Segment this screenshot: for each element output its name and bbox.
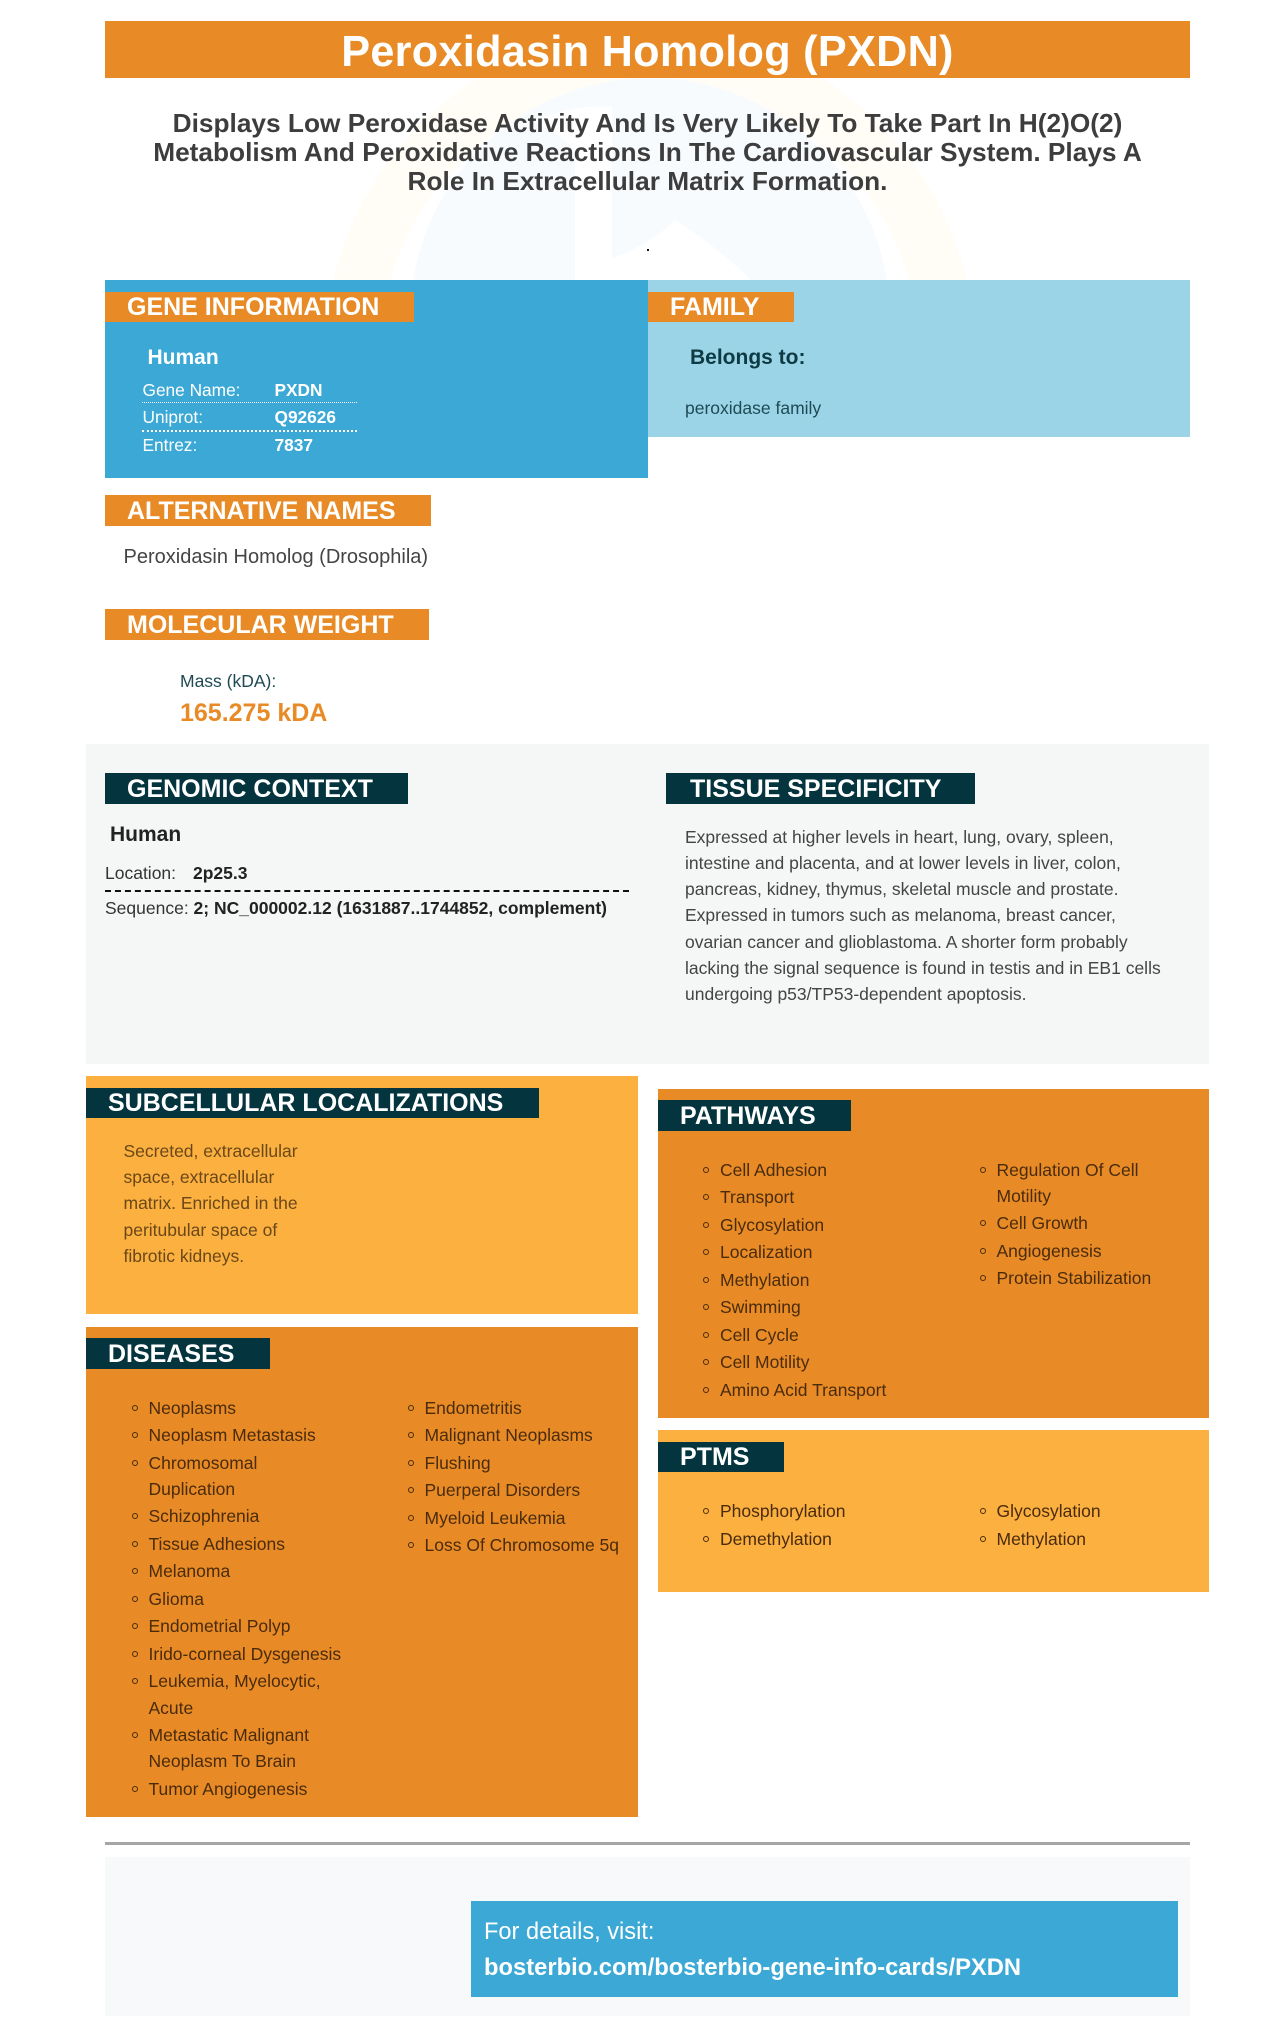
diseases list column 1: Neoplasms: [148, 1398, 236, 1418]
location row: 2p25.3: [193, 863, 247, 883]
pathways list column 1: Cell Adhesion: [720, 1160, 827, 1180]
pathways list column 1: [703, 1160, 886, 1400]
pathways list column 1: Transport: [720, 1187, 794, 1207]
heading: diseases: DISEASES: [108, 1340, 234, 1368]
diseases list column 2: Myeloid Leukemia: [424, 1508, 566, 1528]
ptms list column 1: Demethylation: [720, 1529, 832, 1549]
gene name row: [142, 377, 357, 403]
heading: ptms: [658, 1442, 784, 1472]
diseases list column 1: Schizophrenia: [148, 1506, 259, 1526]
diseases list column 1: Tissue Adhesions: [148, 1534, 285, 1554]
details url: bosterbio.com/bosterbio-gene-info-cards/PXDN: [484, 1954, 1021, 1981]
heading: molecular weight: MOLECULAR WEIGHT: [127, 611, 394, 639]
label: belongs to: Belongs to:: [690, 346, 806, 369]
pathways list column 2: Angiogenesis: [996, 1241, 1102, 1261]
title: Peroxidasin Homolog (PXDN): [341, 28, 954, 76]
subtitle description: Role In Extracellular Matrix Formation.: [408, 166, 887, 196]
diseases list column 2: Endometritis: [424, 1398, 522, 1418]
panel: family: [648, 280, 1190, 437]
label: human: Human: [110, 823, 181, 846]
location row: [105, 860, 629, 892]
uniprot row: Q92626: [274, 407, 336, 427]
diseases list column 1: Melanoma: [148, 1561, 230, 1581]
diseases list column 2: [408, 1398, 619, 1555]
pathways list column 1: Glycosylation: [720, 1215, 824, 1235]
tissue specificity text: lacking the signal sequence is found in testis and in EB1 cells: [685, 958, 1161, 978]
uniprot row: Uniprot:: [142, 407, 203, 427]
tissue specificity text: Expressed in tumors such as melanoma, breast cancer,: [685, 905, 1116, 925]
pathways list column 2: [980, 1160, 1151, 1288]
subcellular text: matrix. Enriched in the: [124, 1193, 298, 1213]
tissue specificity text: pancreas, kidney, thymus, skeletal muscle and prostate.: [685, 879, 1119, 899]
ptms list column 1: [703, 1501, 846, 1549]
background watermark logo: [334, 78, 966, 280]
pathways list column 2: Protein Stabilization: [996, 1268, 1151, 1288]
pathways list column 2: Regulation Of Cell: [996, 1160, 1139, 1180]
diseases list column 2: Flushing: [424, 1453, 491, 1473]
diseases list column 1: Neoplasm To Brain: [148, 1751, 296, 1771]
diseases list column 2: Puerperal Disorders: [424, 1480, 580, 1500]
details label: For details, visit:: [484, 1919, 654, 1945]
entrez row: [142, 435, 313, 455]
diseases list column 1: Acute: [148, 1698, 193, 1718]
heading: tissue specificity: TISSUE SPECIFICITY: [690, 775, 941, 803]
pathways list column 2: Motility: [996, 1186, 1051, 1206]
panel: gene information: [105, 280, 648, 478]
diseases list column 1: Duplication: [148, 1479, 235, 1499]
ptms list column 2: [980, 1501, 1101, 1549]
diseases list column 1: Endometrial Polyp: [148, 1616, 291, 1636]
heading: genomic context: GENOMIC CONTEXT: [127, 775, 373, 803]
subtitle description: Displays Low Peroxidase Activity And Is Very Likely To Take Part In H(2)O(2): [173, 108, 1122, 138]
family text: peroxidase family: [685, 398, 821, 418]
panel: subcellular localizations: [86, 1076, 638, 1314]
mass value: 165.275 kDA: [180, 699, 327, 727]
diseases list column 2: Malignant Neoplasms: [424, 1425, 593, 1445]
tissue specificity text: [685, 827, 1161, 1004]
heading: ptms: PTMS: [680, 1443, 749, 1471]
diseases list column 2: Loss Of Chromosome 5q: [424, 1535, 619, 1555]
panel: genomic context and tissue specificity: [86, 744, 1209, 1064]
diseases list column 1: Leukemia, Myelocytic,: [148, 1671, 321, 1691]
pathways list column 1: Methylation: [720, 1270, 810, 1290]
heading: family: FAMILY: [670, 293, 759, 321]
subcellular text: Secreted, extracellular: [124, 1141, 298, 1161]
diseases list column 1: Irido-corneal Dysgenesis: [148, 1644, 341, 1664]
panel: ptms: [658, 1430, 1209, 1592]
subcellular text: fibrotic kidneys.: [124, 1246, 244, 1266]
tissue specificity text: Expressed at higher levels in heart, lung, ovary, spleen,: [685, 827, 1114, 847]
heading: gene information: GENE INFORMATION: [127, 293, 379, 321]
pathways list column 1: Cell Motility: [720, 1352, 809, 1372]
pathways list column 1: Swimming: [720, 1297, 801, 1317]
title: [105, 21, 1190, 78]
subtitle description: Metabolism And Peroxidative Reactions In The Cardiovascular System. Plays A: [153, 137, 1142, 167]
location row: Location:: [105, 863, 176, 883]
panel: pathways: [658, 1089, 1209, 1418]
pathways list column 2: Cell Growth: [996, 1213, 1088, 1233]
panel: footer: [105, 1857, 1190, 2016]
heading: pathways: PATHWAYS: [680, 1102, 816, 1130]
ptms list column 2: Methylation: [996, 1529, 1086, 1549]
tissue specificity text: undergoing p53/TP53-dependent apoptosis.: [685, 984, 1027, 1004]
pathways list column 1: Amino Acid Transport: [720, 1380, 886, 1400]
diseases list column 1: Tumor Angiogenesis: [148, 1779, 307, 1799]
diseases list column 1: Metastatic Malignant: [148, 1725, 309, 1745]
alternative names text: Peroxidasin Homolog (Drosophila): [124, 546, 428, 568]
heading: subcellular localizations: SUBCELLULAR LOCALIZATIONS: [108, 1089, 503, 1117]
callout: details link: [471, 1901, 1178, 1997]
heading: pathways: [658, 1100, 851, 1131]
pathways list column 1: Localization: [720, 1242, 812, 1262]
tissue specificity text: ovarian cancer and glioblastoma. A shorter form probably: [685, 932, 1128, 952]
ptms list column 1: Phosphorylation: [720, 1501, 846, 1521]
mass label: Mass (kDA):: [180, 671, 276, 691]
diseases list column 1: Glioma: [148, 1589, 204, 1609]
heading: family: [648, 292, 794, 322]
diseases list column 1: Chromosomal: [148, 1453, 257, 1473]
label: human: Human: [148, 346, 219, 369]
gene name row: Gene Name:: [142, 380, 240, 400]
subcellular text: space, extracellular: [124, 1167, 274, 1187]
ptms list column 2: Glycosylation: [996, 1501, 1101, 1521]
uniprot row: [142, 403, 357, 432]
subcellular text: [124, 1141, 298, 1266]
heading: diseases: [86, 1338, 270, 1369]
entrez row: Entrez:: [142, 435, 197, 455]
diseases list column 1: [132, 1398, 341, 1799]
pathways list column 1: Cell Cycle: [720, 1325, 799, 1345]
subtitle description: [153, 108, 1142, 196]
subcellular text: peritubular space of: [124, 1220, 277, 1240]
entrez row: 7837: [274, 435, 313, 455]
sequence row: Sequence: 2; NC_000002.12 (1631887..1744852, complement): [105, 898, 607, 918]
tissue specificity text: intestine and placenta, and at lower levels in liver, colon,: [685, 853, 1121, 873]
diseases list column 1: Neoplasm Metastasis: [148, 1425, 316, 1445]
panel: diseases: [86, 1327, 638, 1817]
small dot: [647, 249, 649, 251]
heading: alternative names: ALTERNATIVE NAMES: [127, 497, 396, 525]
gene name row: PXDN: [274, 380, 323, 400]
